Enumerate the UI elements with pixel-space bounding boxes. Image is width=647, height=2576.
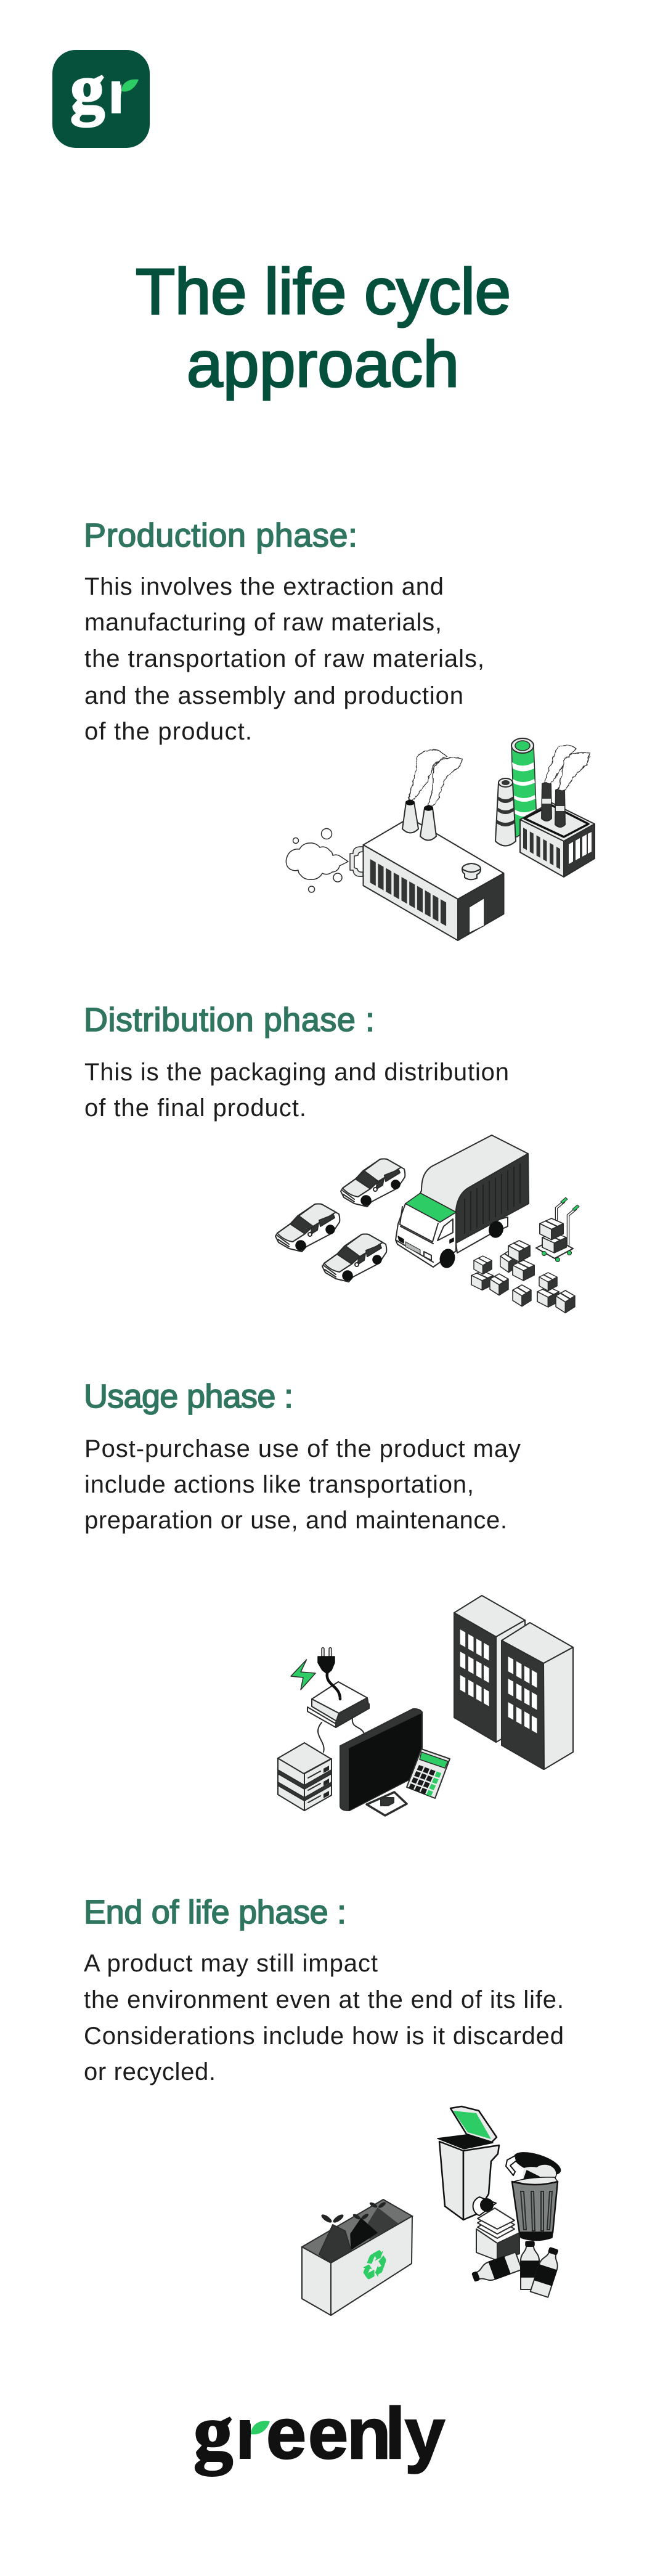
text block: usage description — [84, 1435, 521, 1534]
upright bottles — [521, 2241, 563, 2297]
lightning bolt — [291, 1660, 315, 1690]
infographic — [52, 50, 595, 2477]
power adapter — [307, 1682, 369, 1727]
car — [341, 1159, 405, 1207]
title: The life cycle — [136, 256, 511, 328]
text block: end of life description: A product may still impact — [84, 1950, 378, 1977]
logo: gr app icon: r — [108, 60, 131, 126]
second factory building — [520, 783, 595, 877]
panel: end of life phase — [84, 1894, 564, 2315]
heading: production phase: Production phase: — [84, 517, 357, 554]
buildings — [454, 1596, 573, 1769]
recycling bin — [302, 2199, 412, 2315]
wheeled bin — [437, 2106, 499, 2220]
illustration: waste — [302, 2106, 564, 2315]
text block: usage description: include actions like transportation, — [84, 1471, 474, 1498]
text block: production description: manufacturing of raw materials, — [84, 609, 442, 636]
papers and box — [476, 2208, 519, 2260]
plug and cord — [318, 1648, 340, 1699]
text block: production description — [84, 573, 484, 745]
text block: distribution description: This is the packaging and distribution — [84, 1059, 509, 1086]
footer logo: greenly: r — [235, 2393, 263, 2474]
monitor — [340, 1709, 422, 1816]
text block: end of life description — [84, 1950, 564, 2085]
footer logo: greenly: eenly — [266, 2393, 445, 2474]
heading: usage phase: Usage phase : — [84, 1378, 293, 1415]
striped chimney — [495, 778, 516, 846]
pipe — [350, 847, 363, 876]
car — [275, 1204, 340, 1252]
boxes — [471, 1241, 575, 1313]
text block: production description: the transportation of raw materials, — [84, 645, 484, 672]
heading: end of life phase: End of life phase : — [84, 1894, 346, 1931]
cloud and bubbles — [286, 828, 348, 892]
text block: production description: This involves the extraction and — [84, 573, 444, 600]
text block: end of life description: or recycled. — [84, 2058, 216, 2085]
text block: production description: of the product. — [84, 718, 252, 745]
text block: end of life description: the environment even at the end of its life. — [84, 1986, 564, 2013]
car — [322, 1234, 386, 1282]
text block: distribution description: of the final product. — [84, 1094, 306, 1122]
tall green chimney — [511, 738, 537, 837]
illustration: truck, cars, boxes — [275, 1135, 579, 1313]
logo: gr app icon — [52, 50, 150, 148]
illustration: buildings and electronics — [278, 1596, 573, 1816]
text block: distribution description — [84, 1059, 509, 1122]
title — [136, 256, 511, 401]
text block: end of life description: Considerations include how is it discarded — [84, 2023, 564, 2050]
icon: recycling symbol: ♻ — [361, 2238, 388, 2294]
chimneys — [402, 800, 436, 841]
text block: usage description: Post-purchase use of the product may — [84, 1435, 521, 1462]
panel: production phase — [84, 517, 595, 940]
illustration: factories — [286, 738, 595, 940]
panel: usage phase — [84, 1378, 573, 1816]
logo: gr app icon: g — [70, 51, 105, 127]
hand trolley — [536, 1197, 579, 1262]
text block: usage description: preparation or use, and maintenance. — [84, 1507, 507, 1534]
main factory building — [364, 818, 504, 940]
title: approach — [187, 328, 459, 401]
panel: distribution phase — [84, 1001, 579, 1313]
calculator — [407, 1749, 450, 1798]
server stack — [278, 1743, 332, 1811]
text block: production description: and the assembly and production — [84, 682, 463, 709]
wires — [318, 1718, 364, 1752]
trash can — [506, 2147, 564, 2241]
footer logo: greenly: g — [193, 2388, 233, 2476]
second factory smoke — [545, 746, 590, 790]
lying bottle — [470, 2252, 522, 2286]
smoke — [409, 750, 463, 806]
delivery truck — [396, 1135, 529, 1269]
footer logo: greenly — [195, 2405, 446, 2477]
heading: distribution phase: Distribution phase : — [84, 1001, 375, 1038]
